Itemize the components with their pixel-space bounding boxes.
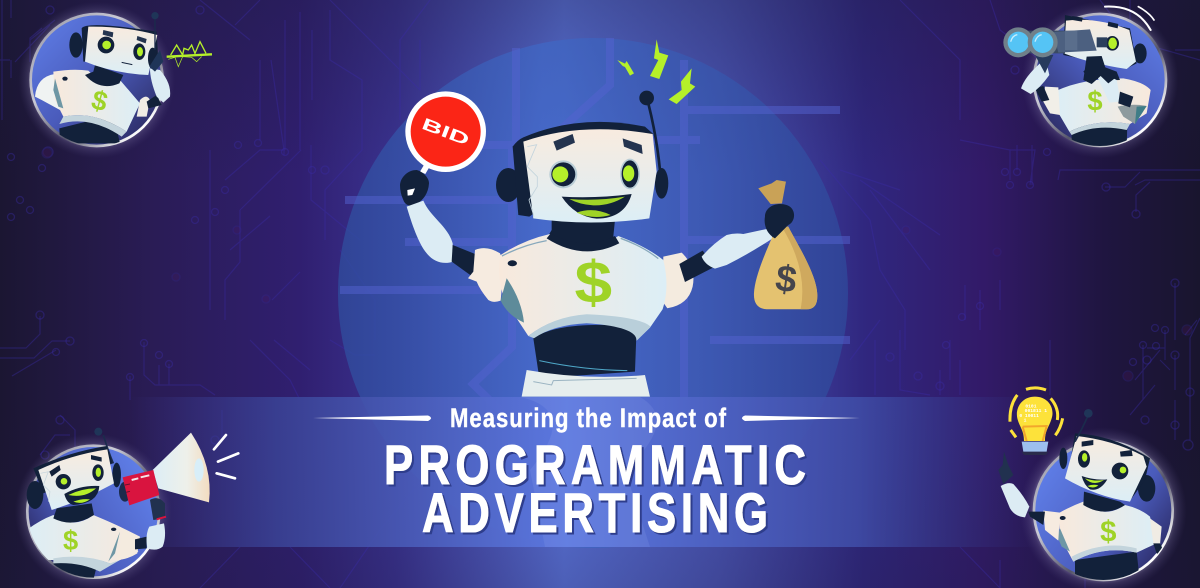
antenna <box>639 91 660 170</box>
icon: money bag: $ <box>773 256 800 301</box>
ears, neck and waist <box>496 168 668 378</box>
hips <box>522 370 650 397</box>
robot bottom right with lightbulb <box>998 388 1187 588</box>
icon: sound rays <box>214 435 238 478</box>
icon: binoculars <box>1003 27 1107 57</box>
large maze circle behind robot <box>338 38 850 548</box>
icon: bid paddle: BID <box>419 114 472 150</box>
circuit nodes <box>8 6 1194 459</box>
icon: lightbulb: 0101 <box>1025 403 1037 409</box>
icon: lightbulb: 1 <box>1024 417 1027 423</box>
decorative line left <box>313 416 431 421</box>
icon: lightbulb <box>1010 388 1063 455</box>
icon: megaphone <box>119 433 210 505</box>
torso <box>499 233 666 371</box>
robot bottom left with megaphone: $ <box>63 525 78 556</box>
right arm <box>663 228 773 308</box>
robot top right with binoculars <box>1003 2 1178 158</box>
robot bottom right with lightbulb: $ <box>1100 515 1116 548</box>
title band <box>130 397 1040 547</box>
title text <box>313 404 860 544</box>
robot top left with signal: $ <box>88 84 111 117</box>
icon: dollar on chest: $ <box>574 249 612 316</box>
robot top left with signal <box>18 2 212 158</box>
left arm holding paddle <box>400 170 504 302</box>
icon: motion arcs <box>1105 7 1154 30</box>
heading line one: PROGRAMMATIC <box>384 434 806 496</box>
icon: money bag <box>754 180 817 309</box>
heading line two: ADVERTISING <box>422 482 768 544</box>
robot bottom left with megaphone <box>15 428 238 588</box>
icon: sparks above antenna <box>617 39 695 104</box>
icon: lightbulb: 001811 1 <box>1025 408 1047 414</box>
icon: signal waveform <box>167 42 212 67</box>
icon: lightbulb: 0 10011 <box>1019 413 1039 419</box>
decorative line right <box>742 416 860 421</box>
head <box>513 122 657 222</box>
robot top right with binoculars: $ <box>1087 86 1103 117</box>
icon: bid paddle <box>405 91 486 174</box>
subtitle: Measuring the Impact of <box>450 404 727 434</box>
main robot character <box>400 39 817 397</box>
